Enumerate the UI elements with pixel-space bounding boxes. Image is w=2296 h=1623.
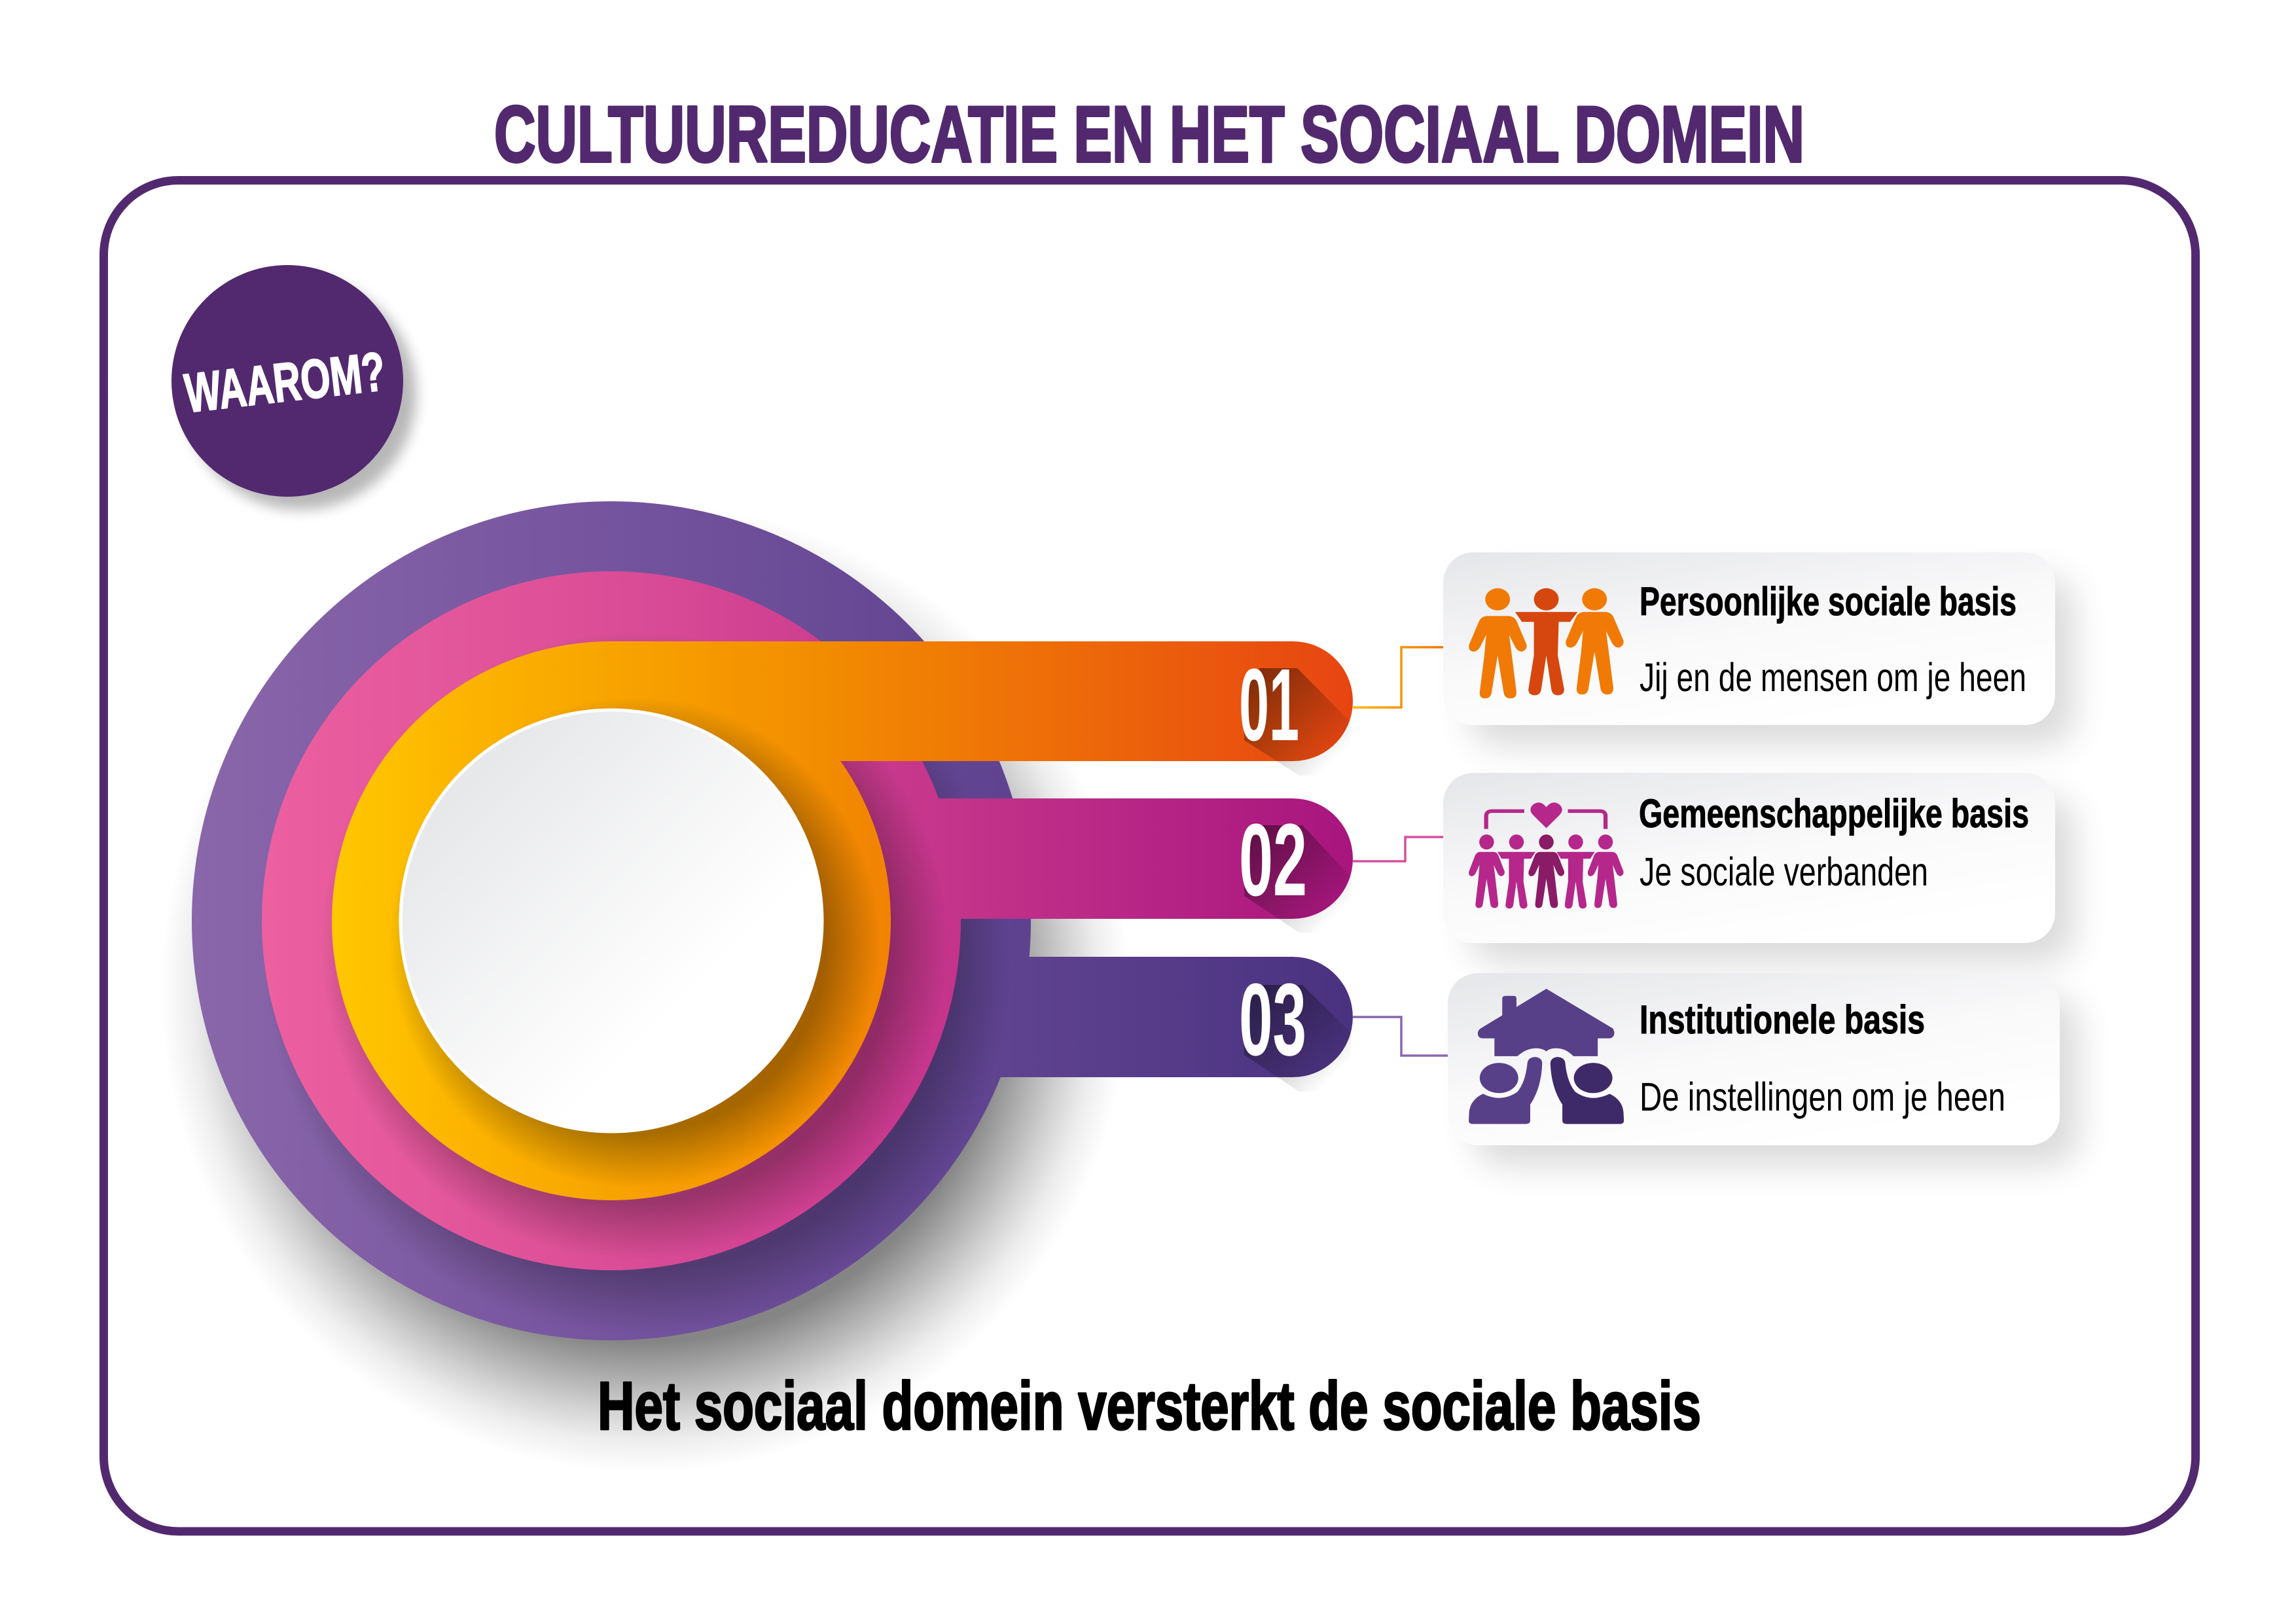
long shadow 03 xyxy=(1244,985,1351,1092)
number 03: 03 xyxy=(1239,963,1306,1077)
description 02: Je sociale verbanden xyxy=(1640,849,1928,894)
long shadow 01 xyxy=(1244,668,1351,776)
long shadow 02 xyxy=(1244,825,1351,933)
chart: concentric rings with numbered bars xyxy=(160,501,1353,1472)
badge: waarom xyxy=(171,265,416,510)
number 01: 01 xyxy=(1239,648,1299,762)
shadow of ring 02 xyxy=(291,761,997,1322)
card 01 xyxy=(1443,552,2075,746)
connector 01 xyxy=(1353,647,1443,707)
ring 03 with bar: institutional xyxy=(192,501,1353,1340)
title: CULTUUREDUCATIE EN HET SOCIAAL DOMEIN xyxy=(494,90,1804,179)
ring 02 with bar: community xyxy=(262,571,1353,1270)
description 03: De instellingen om je heen xyxy=(1640,1075,2005,1119)
heading 02: Gemeenschappelijke basis xyxy=(1639,791,2029,836)
description 01: Jij en de mensen om je heen xyxy=(1640,655,2026,700)
icon: house with people xyxy=(1469,989,1624,1124)
ring shadow on page xyxy=(160,504,1129,1472)
icon: community with heart xyxy=(1469,802,1624,908)
badge label: WAAROM? xyxy=(181,340,388,424)
heading 01: Persoonlijke sociale basis xyxy=(1640,579,2017,624)
card 02 xyxy=(1443,773,2075,963)
shadow of ring 01 xyxy=(319,632,948,1260)
centre disc xyxy=(401,710,822,1132)
card 03 xyxy=(1448,973,2079,1166)
connector 02 xyxy=(1353,837,1443,861)
shadow of centre disc xyxy=(389,697,880,1188)
panel: rounded frame xyxy=(103,181,2195,1531)
heading 03: Institutionele basis xyxy=(1640,997,1925,1042)
connector 03 xyxy=(1353,1017,1448,1056)
ring 01 with bar: personal xyxy=(332,641,1353,1200)
conclusion text: Het sociaal domein versterkt de sociale basis xyxy=(598,1368,1701,1444)
icon: three people xyxy=(1469,588,1624,698)
number 02: 02 xyxy=(1239,803,1307,918)
